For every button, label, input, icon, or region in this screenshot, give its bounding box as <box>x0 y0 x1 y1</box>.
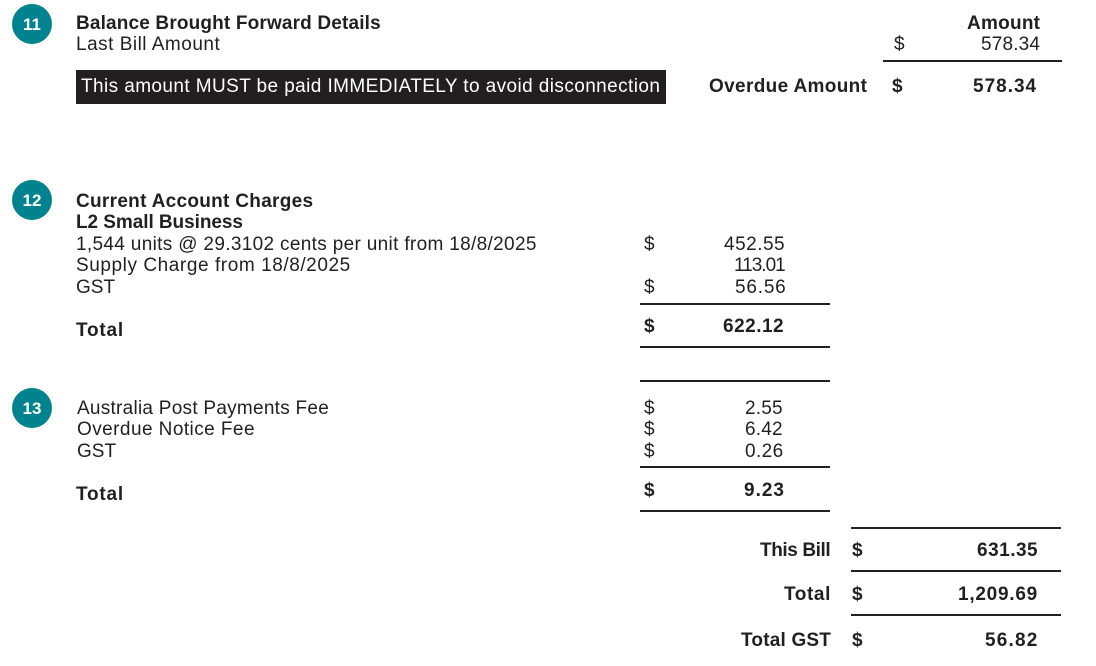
overdue notice label: Overdue Notice Fee <box>77 419 255 440</box>
fee total dollar sign: $ <box>644 480 655 501</box>
fee total label: Total <box>76 484 124 505</box>
GST dollar sign: $ <box>644 277 655 298</box>
payments fee amount: 2.55 <box>745 398 783 419</box>
supply charge amount: 113.01 <box>734 255 785 276</box>
total label: Total <box>784 584 831 605</box>
fee total amount: 9.23 <box>744 480 785 501</box>
units dollar sign: $ <box>644 234 655 255</box>
fee GST label: GST <box>77 441 116 462</box>
overdue dollar sign: $ <box>892 76 903 97</box>
last bill dollar sign: $ <box>894 34 905 55</box>
overdue amount value: 578.34 <box>973 76 1037 97</box>
this bill label: This Bill <box>760 540 830 561</box>
overdue notice dollar sign: $ <box>644 419 655 440</box>
badge 13: 13 <box>23 399 41 418</box>
badge 11: 11 <box>23 15 41 34</box>
total dollar sign: $ <box>852 584 863 605</box>
total amount: 1,209.69 <box>958 584 1038 605</box>
overdue amount label: Overdue Amount <box>709 76 867 97</box>
badge 13 <box>12 388 52 428</box>
badge 11 <box>12 4 52 44</box>
this bill amount: 631.35 <box>977 540 1038 561</box>
fee GST dollar sign: $ <box>644 441 655 462</box>
overdue notice amount: 6.42 <box>745 419 783 440</box>
supply charge label: Supply Charge from 18/8/2025 <box>76 255 351 276</box>
heading: current account charges: Current Account Charges <box>76 191 313 212</box>
heading: balance brought forward: Balance Brought Forward Details <box>76 13 381 34</box>
total GST dollar sign: $ <box>852 630 863 651</box>
fee GST amount: 0.26 <box>745 441 784 462</box>
disconnection warning banner: This amount MUST be paid IMMEDIATELY to avoid disconnection <box>81 76 660 97</box>
subheading: plan name: L2 Small Business <box>76 212 243 233</box>
this bill dollar sign: $ <box>852 540 863 561</box>
payments fee dollar sign: $ <box>644 398 655 419</box>
GST label: GST <box>76 277 115 298</box>
total amount: 622.12 <box>723 316 784 337</box>
GST amount: 56.56 <box>735 277 787 298</box>
disconnection warning banner <box>76 70 666 104</box>
total GST amount: 56.82 <box>985 630 1039 651</box>
last bill row label: Last Bill Amount <box>76 34 220 55</box>
units amount: 452.55 <box>724 234 785 255</box>
total dollar sign: $ <box>644 316 655 337</box>
badge 12: 12 <box>23 191 41 210</box>
total GST label: Total GST <box>741 630 831 651</box>
units row label: 1,544 units @ 29.3102 cents per unit from 18/8/2025 <box>76 234 537 255</box>
payments fee label: Australia Post Payments Fee <box>77 398 329 419</box>
total label: Total <box>76 320 124 341</box>
heading: amount: Amount <box>967 13 1040 34</box>
last bill amount: 578.34 <box>981 34 1040 55</box>
badge 12 <box>12 180 52 220</box>
